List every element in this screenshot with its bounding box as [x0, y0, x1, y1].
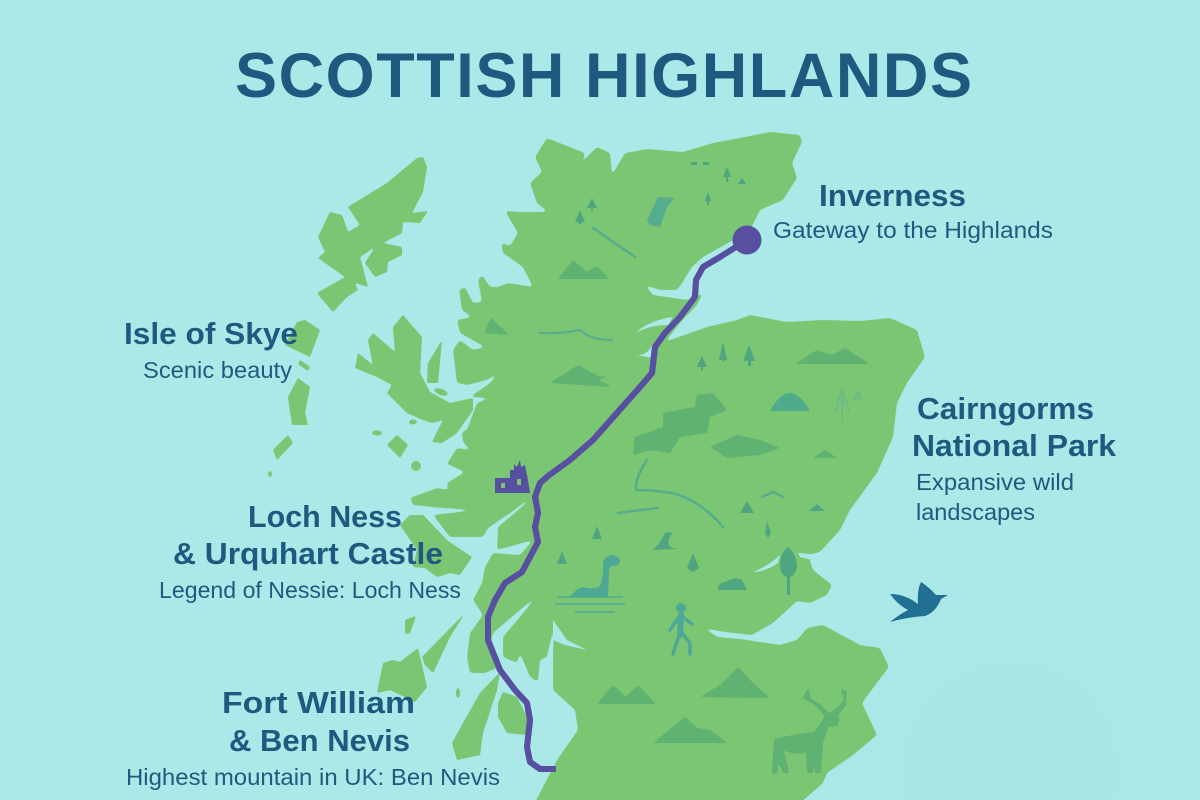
label: Inverness: Inverness	[819, 178, 966, 213]
label: Isle of Skye	[124, 316, 298, 383]
peninsula: Kintyre	[452, 672, 500, 760]
island: Muck	[411, 461, 421, 471]
label: Fort William: Fort William	[222, 685, 415, 720]
island: Lewis and Harris	[317, 157, 428, 312]
river: central west	[540, 330, 612, 340]
sea loch inlets	[553, 317, 813, 650]
route	[488, 240, 747, 769]
label: Cairngorms National Park	[912, 391, 1117, 525]
river: diagonal north	[593, 228, 635, 257]
island: Gigha	[456, 688, 460, 698]
label: Loch Ness	[159, 499, 461, 603]
label: Inverness	[773, 178, 1053, 243]
Inverness marker	[732, 226, 762, 254]
pine: tall	[834, 387, 850, 422]
island: Soay	[433, 387, 449, 397]
island: Barra	[273, 435, 293, 460]
title: SCOTTISH HIGHLANDS	[235, 41, 972, 111]
island: Islay	[377, 648, 427, 702]
icon: Urquhart Castle	[495, 460, 530, 493]
label: Fort William	[126, 685, 500, 790]
icon: walking figure	[670, 603, 692, 654]
mountain: west ridge	[550, 365, 612, 387]
mountain: small west	[484, 318, 509, 335]
river: short	[618, 508, 658, 513]
island: Harris tip	[285, 320, 320, 357]
map of the Highlands	[268, 132, 948, 800]
island: Canna	[372, 430, 382, 436]
label: Inverness: Gateway to the Highlands	[773, 217, 1053, 243]
island: Mingulay	[268, 471, 272, 477]
label: Cairngorms National Park: landscapes	[916, 499, 1035, 525]
trees: Sutherland	[691, 162, 746, 205]
island: Mull	[400, 515, 472, 577]
label: Loch Ness: Legend of Nessie: Loch Ness	[159, 577, 461, 603]
island: Uist	[288, 378, 310, 425]
label: Fort William: & Ben Nevis	[229, 723, 410, 758]
island: Berneray	[298, 360, 310, 371]
wave	[652, 532, 677, 550]
mountain: south 2	[700, 667, 770, 698]
islands	[268, 157, 527, 760]
label: Cairngorms National Park: National Park	[912, 428, 1117, 463]
river: east	[762, 492, 783, 497]
label: Loch Ness: Loch Ness	[248, 499, 402, 534]
mountain: Cairngorms	[795, 348, 870, 364]
icon: deer	[773, 690, 846, 773]
forest blob	[633, 393, 727, 455]
icon: bird	[890, 582, 948, 622]
label: Loch Ness: & Urquhart Castle	[173, 536, 443, 571]
label: Cairngorms National Park: Expansive wild	[916, 469, 1074, 495]
small hill	[813, 450, 837, 458]
mountains	[484, 260, 870, 773]
mountain: south 1	[597, 685, 656, 704]
trees: east	[557, 501, 825, 572]
mountain: south 3	[653, 717, 727, 743]
pine: small	[854, 390, 862, 402]
island: Arran	[498, 692, 527, 735]
landmass: mainland	[410, 132, 925, 800]
mound	[770, 393, 810, 411]
island: Eigg	[409, 420, 417, 424]
rivers and lochs	[540, 197, 783, 527]
bush	[718, 578, 747, 590]
trees: Cairngorm	[697, 342, 755, 370]
island: Jura	[422, 613, 465, 673]
label: Cairngorms National Park: Cairngorms	[917, 391, 1094, 426]
island: Coll	[405, 616, 416, 634]
forest blob 2	[710, 435, 780, 458]
label: Isle of Skye: Scenic beauty	[143, 357, 293, 383]
label: Fort William: Highest mountain in UK: Ben Nevis	[126, 764, 500, 790]
trees: north	[575, 198, 597, 224]
tree: large	[780, 547, 797, 595]
island: Raasay	[427, 340, 442, 383]
label: Isle of Skye: Isle of Skye	[124, 316, 298, 351]
mountain: north	[558, 260, 609, 279]
pines	[834, 387, 862, 422]
island: Rum	[387, 435, 408, 458]
river: long central	[636, 460, 723, 527]
small trees	[557, 162, 825, 595]
island: Skye	[355, 315, 473, 443]
icon: Nessie	[555, 555, 625, 612]
loch: northern	[647, 197, 675, 227]
